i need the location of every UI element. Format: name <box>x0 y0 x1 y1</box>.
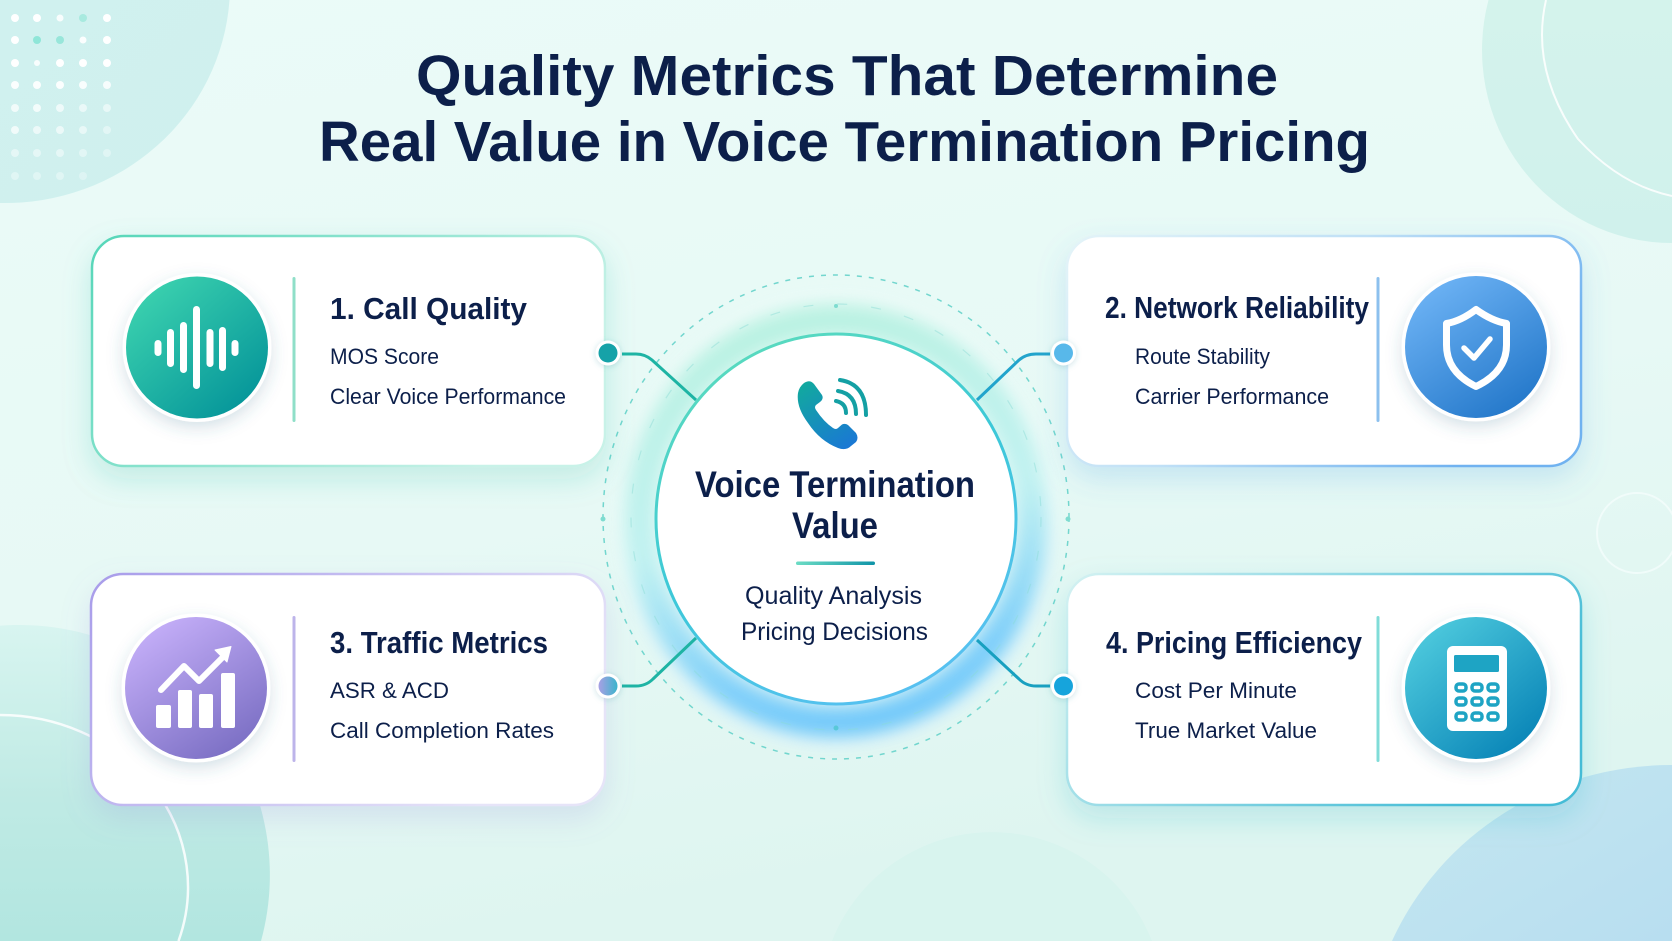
hub heading: Value <box>792 505 878 546</box>
node: call quality <box>596 340 620 366</box>
icon: phone with signal <box>798 380 866 449</box>
heading: traffic metrics: 3. Traffic Metrics <box>330 625 548 660</box>
hub text <box>741 582 928 646</box>
connector: network reliability <box>977 354 1050 400</box>
text: call quality details: Clear Voice Performance <box>330 384 566 409</box>
text: network reliability details <box>1135 344 1329 409</box>
title <box>319 44 1370 174</box>
panel: pricing efficiency <box>1067 574 1581 805</box>
title: Quality Metrics That Determine <box>416 44 1278 108</box>
icon: shield <box>1402 272 1550 422</box>
connector: pricing efficiency <box>977 640 1050 686</box>
text: call quality details <box>330 344 566 409</box>
central hub <box>656 334 1016 704</box>
connector: call quality <box>622 354 696 400</box>
title: Real Value in Voice Termination Pricing <box>319 110 1370 174</box>
text: traffic metrics details: ASR & ACD <box>330 678 449 703</box>
hub heading <box>695 464 975 546</box>
hub heading: Voice Termination <box>695 464 975 505</box>
text: traffic metrics details <box>330 678 554 743</box>
text: network reliability details: Route Stability <box>1135 344 1270 369</box>
node: traffic metrics <box>596 674 620 698</box>
heading: call quality: 1. Call Quality <box>330 291 528 326</box>
text: pricing efficiency details <box>1135 678 1317 743</box>
hub text: Quality Analysis <box>745 582 922 610</box>
panel: network reliability <box>1067 236 1581 466</box>
panel: traffic metrics <box>91 574 605 805</box>
node: pricing efficiency <box>1051 674 1076 698</box>
icon: calculator <box>1402 614 1550 762</box>
text: pricing efficiency details: Cost Per Minute <box>1135 678 1297 703</box>
icon: sound wave <box>122 273 272 422</box>
connector: traffic metrics <box>622 638 696 686</box>
hub text: Pricing Decisions <box>741 618 928 646</box>
heading: pricing efficiency: 4. Pricing Efficiency <box>1106 625 1363 660</box>
dot pattern <box>11 14 111 180</box>
text: traffic metrics details: Call Completion Rates <box>330 718 554 743</box>
panel: call quality <box>92 236 605 466</box>
central rings <box>600 275 1070 759</box>
text: network reliability details: Carrier Performance <box>1135 384 1329 409</box>
icon: growth chart <box>122 614 270 762</box>
node: network reliability <box>1051 340 1076 366</box>
text: pricing efficiency details: True Market Value <box>1135 718 1317 743</box>
heading: network reliability: 2. Network Reliability <box>1105 290 1370 325</box>
text: call quality details: MOS Score <box>330 344 439 369</box>
